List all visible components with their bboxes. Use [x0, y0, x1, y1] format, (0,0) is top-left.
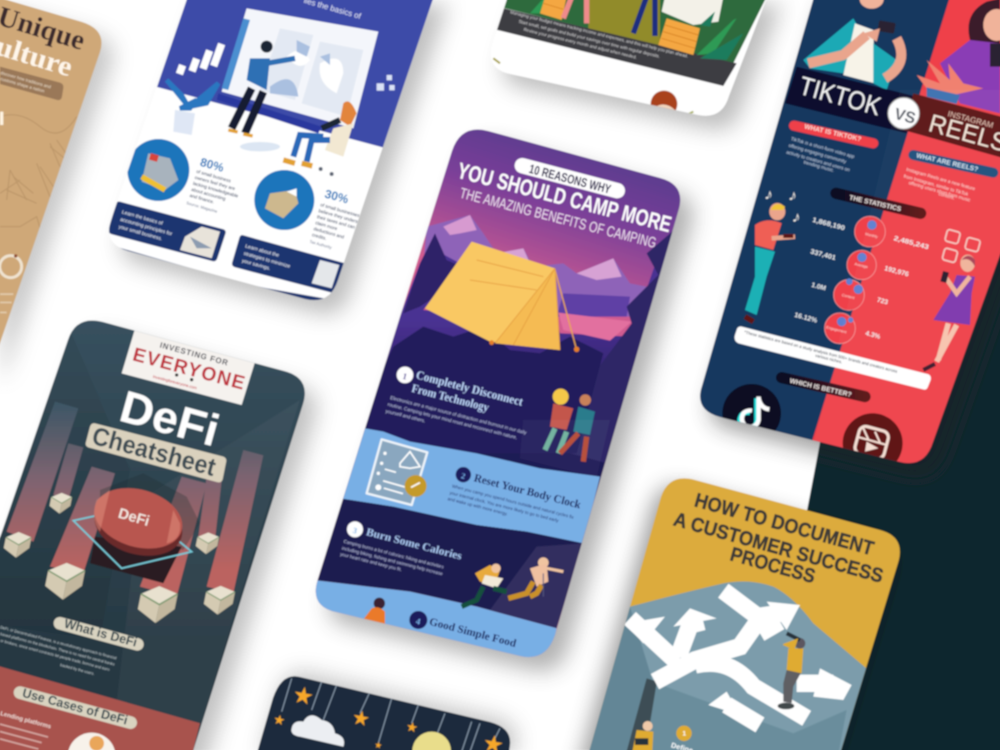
- stat: 30 percent: their taxes and can: [316, 214, 356, 230]
- stat: 80 percent: of small business: [196, 169, 232, 184]
- white branding box: investingforeveryone.com: [152, 374, 198, 391]
- icon: TikTok logo: [722, 384, 781, 443]
- stars: [272, 681, 506, 750]
- step 2: your internal clock. You are more likely to go to bed early: [449, 490, 560, 523]
- stat: 80 percent: about accounting: [191, 187, 227, 201]
- panel: tan culture card: [0, 0, 120, 390]
- subheading: THE AMAZING BENEFITS OF CAMPING: [458, 186, 658, 252]
- panel: green finance card: [480, 0, 782, 130]
- callout: taxes: Learn about the: [244, 243, 280, 259]
- woman with phone: [940, 0, 1000, 113]
- dashboard screen: [222, 8, 378, 128]
- panel: customer success card: [570, 460, 920, 750]
- dark navy band: [313, 498, 583, 628]
- stat: 80 percent: lacking knowledgeable: [192, 181, 239, 199]
- text: TikTok description: TikTok is a short-form video app: [790, 136, 855, 159]
- callout: taxes: your savings.: [241, 258, 271, 272]
- step 4: [409, 611, 517, 650]
- pill: use cases: Use Cases of DeFi: [21, 686, 129, 728]
- figures: [563, 0, 655, 36]
- stars: ★: [405, 719, 419, 736]
- step 3: Camping burns a lot of calories: hiking and activities: [343, 539, 445, 570]
- stars: ★: [272, 712, 287, 728]
- card sheen: [800, 90, 1000, 500]
- TikTok logos floating: [764, 190, 800, 223]
- statistics circles: Monthly: [865, 232, 878, 239]
- white note bar: *These statistics are based on a study analysis from 500+ brands and creators across: [744, 329, 898, 374]
- stat: 30 percent: [254, 170, 367, 250]
- hikers illustration: [545, 389, 595, 462]
- pill: the statistics: THE STATISTICS: [849, 194, 902, 213]
- text: Reels description: Instagram Reels are a new feature: [906, 167, 976, 191]
- dark trees right: [570, 225, 693, 487]
- text: TikTok description: trending music.: [803, 159, 835, 173]
- step 1 heading: 1: [401, 371, 408, 382]
- step 1 heading: Completely Disconnect: [415, 368, 525, 409]
- pill: what is DeFi: What is DeFi: [63, 617, 139, 650]
- woman figure: [923, 255, 975, 370]
- stat: 30 percent: believe they understand: [318, 208, 367, 227]
- step 3: including biking, fishing and swimming help increase: [341, 545, 444, 576]
- statistics numbers: 337,401: [809, 248, 837, 262]
- pill: 10 reasons why: 10 REASONS WHY: [528, 162, 613, 197]
- pill: what is TikTok: WHAT IS TIKTOK?: [804, 123, 862, 143]
- pill: which is better: WHICH IS BETTER?: [789, 378, 852, 399]
- arrowheads: [625, 602, 852, 715]
- statistics numbers: 192,976: [883, 265, 910, 278]
- woman illustration: [362, 598, 385, 627]
- maze block: [570, 581, 868, 750]
- avatar circle: [68, 733, 116, 750]
- stat: 80 percent: and finance.: [189, 193, 215, 205]
- panel: night sky card: [240, 660, 530, 750]
- text: TikTok description: offering engaging community: [788, 143, 847, 164]
- stat: 80 percent: [127, 139, 239, 214]
- panel: blue small-business card: [90, 0, 448, 320]
- dark background panel: [760, 200, 1000, 750]
- stat: 30 percent: claim more: [315, 220, 338, 231]
- step 3: [340, 521, 463, 576]
- statistics numbers: 1,868,190: [811, 217, 846, 232]
- statistics circles: Engagement: [826, 325, 847, 334]
- text: Reels description: content.: [938, 191, 955, 201]
- step number: [670, 726, 694, 750]
- step 3: 3: [352, 526, 358, 536]
- light blue band: [340, 428, 600, 543]
- footer strip: [120, 248, 324, 302]
- heading: unique culture: [0, 6, 84, 77]
- icon: potted plant: [167, 80, 218, 135]
- stat: 80 percent: 80%: [199, 155, 226, 175]
- DeFi coin and platform: DeFi: [116, 506, 151, 530]
- text: DeFi description: DeFi, or Decentralized Finance, is a revolutionary approach to financial: [0, 625, 117, 660]
- TikTok logos floating: ♪: [787, 187, 799, 205]
- stars: ★: [291, 681, 316, 710]
- text: lending platforms: [0, 711, 52, 750]
- versus banner: TIKTOK: [796, 70, 885, 122]
- stat: 80 percent: owners feel they are: [194, 175, 236, 191]
- statistics numbers: 723: [876, 297, 889, 307]
- stat: 30 percent: credits.: [311, 232, 327, 241]
- dark trees left: [397, 233, 462, 333]
- seated person: [630, 721, 653, 750]
- man figure: [745, 203, 795, 322]
- heading: how to document: A CUSTOMER SUCCESS: [671, 509, 886, 588]
- callout: taxes: [232, 235, 348, 294]
- step 2: When you camp you spend hours outside and natural cycles fix: [451, 483, 575, 520]
- coin stacks: [540, 0, 700, 55]
- callout: accounting: [108, 202, 226, 261]
- white branding box: [122, 323, 257, 405]
- head with red hair: [650, 90, 678, 111]
- white note bar: [735, 327, 931, 390]
- statistics numbers: [793, 217, 930, 341]
- step 2: 2: [460, 471, 466, 481]
- statistics numbers: 2,485,243: [893, 235, 930, 251]
- pill: cheatsheet: Cheatsheet: [89, 422, 219, 482]
- stat: 30 percent: of small businesses: [320, 202, 361, 218]
- versus banner: [785, 67, 1000, 160]
- step 2: Reset Your Body Clock: [473, 472, 583, 512]
- step 2: and wake up with more energy.: [447, 496, 508, 516]
- text: Reels description: [903, 167, 976, 203]
- forest and foreground: [310, 220, 710, 553]
- white branding box: INVESTING FOR: [159, 341, 229, 368]
- stat: 30 percent: Tax Authority: [309, 239, 332, 250]
- step 2: [447, 467, 583, 523]
- statistics circles: [825, 216, 885, 344]
- step 3: Burn Some Calories: [365, 526, 463, 563]
- text: Reels description: offering users short-form music: [908, 180, 972, 203]
- pill: what are reels: WHAT ARE REELS?: [916, 152, 979, 173]
- icon: bar chart: [176, 43, 225, 75]
- panel: camping card: [300, 110, 710, 700]
- olive scene background: [588, 0, 660, 50]
- man with phone: [803, 0, 901, 90]
- heading: you should camp more: YOU SHOULD CAMP MORE: [455, 157, 674, 237]
- statistics circles: Content: [841, 293, 855, 300]
- stat: 30 percent: deductions and: [313, 226, 345, 240]
- bottom light blue band: [300, 580, 557, 700]
- coral plant: [917, 60, 983, 104]
- gray caption band: Managing your budget means tracking income and expenses, and this will help you plan ahead.: [510, 9, 689, 59]
- callout: accounting: Learn the basics of: [121, 209, 164, 227]
- text: Reels description: from Instagram, similar to TikTok: [903, 173, 969, 197]
- sketch of trees: [0, 115, 77, 233]
- gray caption band: Review your progress every month and adjust when needed.: [523, 27, 637, 60]
- text: DeFi description: based platforms on the blockchain. There is no need for central banks: [0, 632, 115, 667]
- heading: DeFi: DeFi: [115, 380, 225, 456]
- gray caption band: [487, 7, 737, 86]
- pill: the statistics: [836, 193, 921, 213]
- stat: 30 percent: 30%: [323, 187, 350, 207]
- versus banner: VS: [892, 106, 918, 128]
- subtitle label: discover how traditions and: [0, 70, 52, 90]
- subtitle label: [0, 67, 63, 100]
- sheen over navy band: [490, 543, 583, 628]
- subtitle label: customs shape a nation: [0, 76, 46, 94]
- icon: blue nodes: [377, 75, 395, 91]
- statistics numbers: 4.3%: [864, 330, 881, 341]
- statistics circles: Average: [854, 262, 868, 269]
- step number: 1: [682, 731, 686, 738]
- step 1 text: Electronics are a major source of distraction and burnout in our daily: [390, 395, 528, 435]
- panel: TikTok vs Reels card: [680, 0, 1000, 500]
- icon: Reels logo: [843, 413, 903, 473]
- mountains: [423, 215, 647, 317]
- runners illustration: [462, 557, 563, 607]
- white note bar: various niches.: [815, 353, 843, 365]
- Reels logos floating: [942, 229, 981, 263]
- text: DeFi description: [0, 625, 117, 676]
- light beams: [7, 402, 263, 597]
- cloud: [291, 715, 344, 747]
- step 4: Good Simple Food: [428, 616, 517, 650]
- DeFi coin and platform: [73, 473, 200, 583]
- callout: accounting: accounting principles for: [119, 217, 173, 237]
- leaves: [530, 0, 743, 60]
- white branding box: EVERYONE: [130, 345, 247, 395]
- moon: [412, 732, 451, 750]
- callout: accounting: your small business.: [118, 224, 163, 242]
- step 1 heading: From Technology: [410, 381, 491, 414]
- text: DeFi description: or brokers, since smart contracts let people trade, borrow and earn: [0, 639, 110, 672]
- step 1 text: routine. Camping lets your mind reset and reconnect with nature,: [387, 402, 518, 440]
- callout: taxes: strategies to minimize: [243, 251, 291, 270]
- dark grass tufts: [343, 327, 603, 453]
- TikTok logos floating: ♪: [791, 208, 802, 227]
- icon: map document: [367, 439, 427, 505]
- red section: [0, 663, 200, 750]
- text: DeFi description: backed by the users.: [60, 663, 95, 676]
- gray caption band: Start small, set goals and build your savings over time with regular deposits.: [518, 19, 661, 59]
- person seated: [283, 101, 357, 176]
- heading: how to document: PROCESS: [728, 544, 818, 588]
- step 4: 4: [415, 616, 422, 627]
- tent: [425, 242, 579, 352]
- statistics numbers: 1.0M: [810, 282, 827, 293]
- text: lending platforms: Lending platforms: [0, 711, 52, 731]
- stat: 80 percent: Source: Magazine: [186, 200, 219, 214]
- hanging strings: [282, 678, 500, 750]
- person presenting: [228, 41, 295, 136]
- heading: how to document: HOW TO DOCUMENT: [692, 490, 876, 560]
- text: TikTok description: activity to creators and users on: [786, 149, 851, 173]
- statistics numbers: 16.12%: [793, 312, 818, 325]
- TikTok logos floating: ♪: [763, 186, 775, 204]
- versus banner: INSTAGRAM: [947, 109, 994, 130]
- cubes: [4, 493, 235, 623]
- step 3: your heart rate and keep you fit.: [340, 551, 402, 572]
- floor stripe: [217, 93, 322, 133]
- document panel: [662, 0, 723, 25]
- lake: [558, 313, 632, 341]
- pill: 10 reasons why: [522, 162, 617, 197]
- icon: progress ring: [0, 256, 22, 278]
- white maze arrows: [630, 591, 833, 725]
- stars: ★: [350, 707, 372, 731]
- panel: DeFi cheatsheet card: [0, 300, 330, 750]
- text: TikTok description: [786, 136, 855, 173]
- step 1 text: yourself and others.: [385, 408, 426, 424]
- person with telescope: [778, 633, 805, 709]
